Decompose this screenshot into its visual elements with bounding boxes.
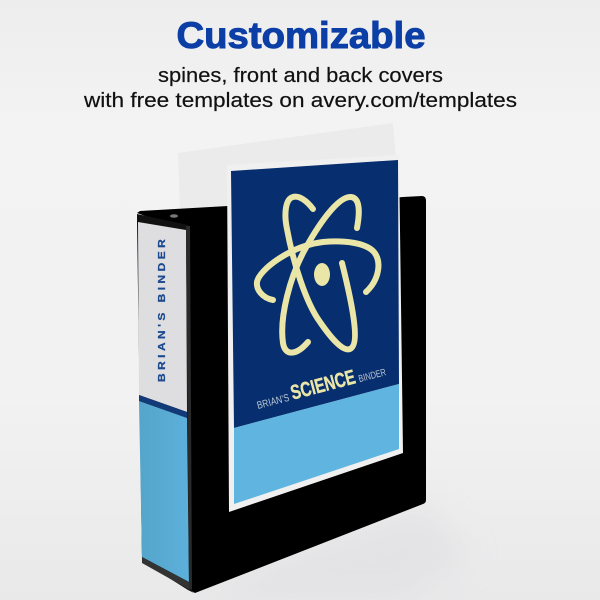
spine: [137, 214, 194, 593]
spine navy stripe: [139, 395, 187, 418]
spine hinge strip: [186, 226, 192, 590]
caption word: BRIAN'S: BRIAN'S: [256, 392, 291, 412]
spine white label: [138, 222, 187, 412]
inserted paper sheet: [178, 123, 399, 240]
binder interior top edge: [137, 206, 228, 232]
front cover: [186, 196, 426, 593]
spine bottom edge: [142, 557, 190, 590]
atom nucleus: [314, 263, 330, 286]
cover caption: [253, 358, 388, 414]
title: Customizable: [176, 14, 426, 56]
spine ring hole: [170, 214, 178, 218]
subtitle: spines, front and back covers: [158, 64, 443, 87]
subtitle: with free templates on avery.com/templates: [83, 89, 517, 112]
spine frame: [137, 214, 194, 593]
floor shadow: [200, 500, 470, 600]
caption word: BINDER: BINDER: [357, 367, 387, 385]
caption word: SCIENCE: SCIENCE: [288, 366, 358, 405]
insert blue panel: [234, 384, 399, 504]
spine blue panel: [139, 401, 189, 582]
insert white border: [227, 155, 403, 512]
atom logo: [257, 197, 378, 353]
insert navy panel: [231, 160, 399, 428]
front cover insert: [227, 155, 403, 512]
binder: [137, 123, 426, 593]
subtitle: [83, 64, 517, 112]
spine text: BRIAN'S BINDER: [157, 239, 168, 382]
